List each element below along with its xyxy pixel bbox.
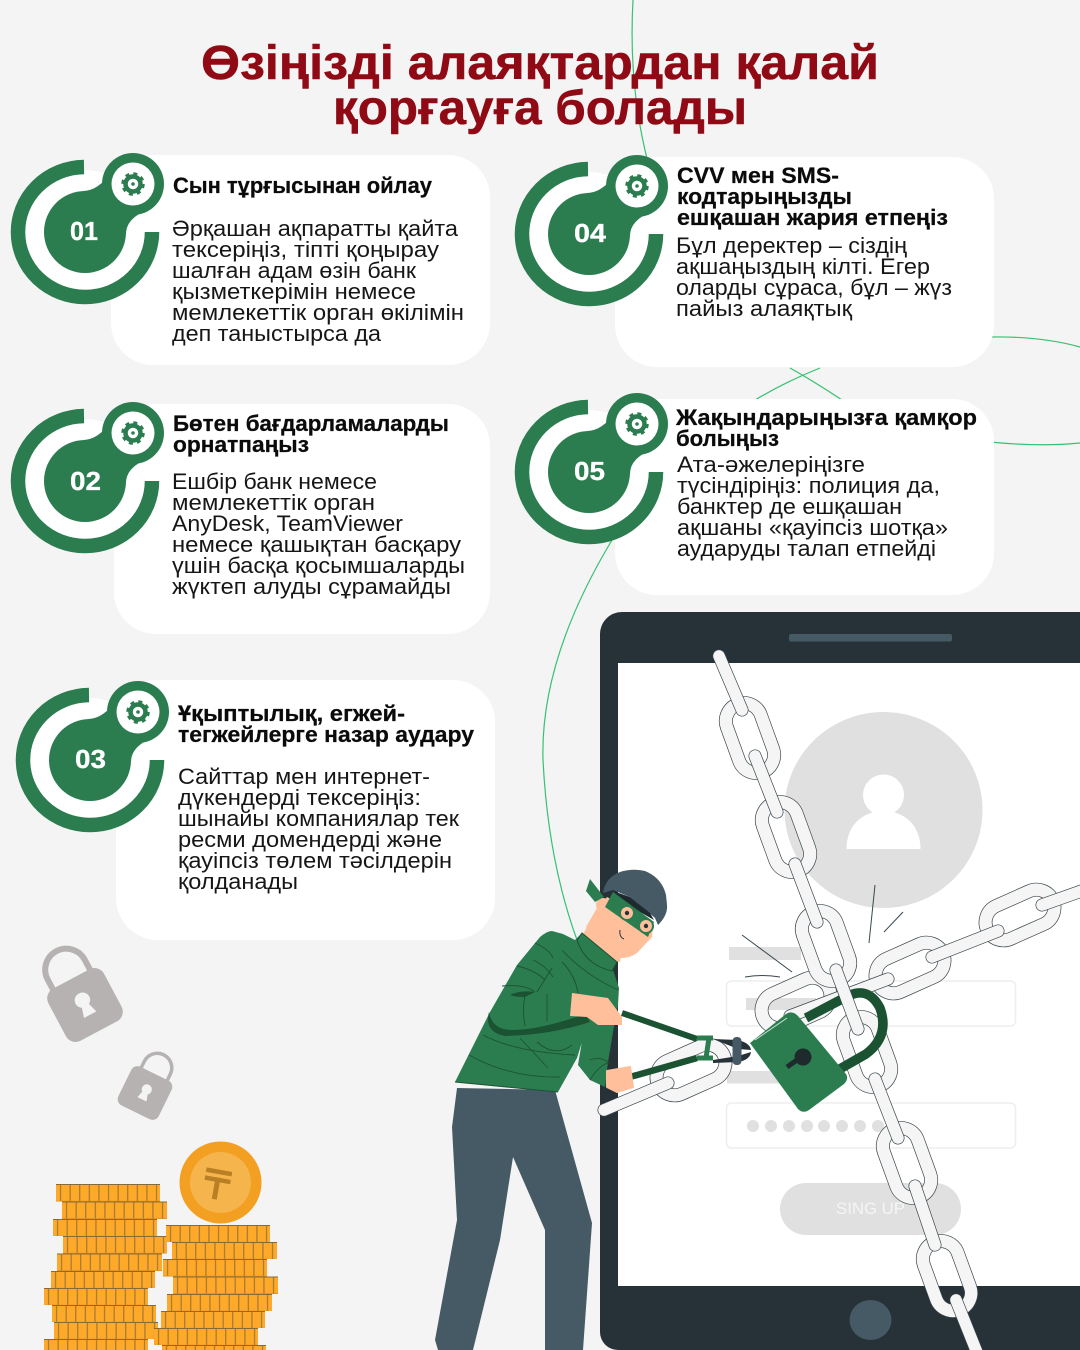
thief hair	[613, 891, 654, 920]
panel: tip 02: AnyDesk, TeamViewer	[172, 511, 404, 536]
thief head	[586, 897, 653, 958]
chain: horizontal	[604, 884, 1080, 1110]
panel: tip 03: ресми домендерді және	[178, 827, 442, 852]
panel: tip 02: үшін басқа қосымшаларды	[172, 553, 465, 578]
panel: tip 04: кодтарыңызды	[677, 184, 852, 209]
panel: tip 01: Әрқашан ақпаратты қайта	[172, 216, 459, 241]
spark lines	[742, 885, 903, 977]
thief sweater	[455, 931, 619, 1092]
icon: small grey padlock	[115, 1045, 184, 1122]
panel: tip 02: Бөтен бағдарламаларды	[173, 411, 449, 436]
green padlock	[750, 1012, 847, 1112]
panel: tip 05: түсіндіріңіз: полиция да,	[677, 473, 940, 498]
panel: tip 03: дүкендерді тексеріңіз:	[178, 785, 421, 810]
panel: tip 01: Сын тұрғысынан ойлау	[173, 173, 433, 198]
panel: tip 02: жүктеп алуды сұрамайды	[172, 574, 451, 599]
panel: tip 02	[18, 402, 490, 634]
panel: tip 02: 02	[70, 466, 101, 496]
panel: tip 05: Жақындарыңызға қамқор	[675, 405, 977, 430]
coin stack: right	[154, 1225, 278, 1350]
padlock shackle	[806, 993, 883, 1070]
sign up button: SING UP	[836, 1200, 905, 1218]
thief hat	[603, 870, 667, 925]
panel: tip 05	[522, 393, 994, 595]
tablet screen	[618, 663, 1080, 1286]
thief ear	[596, 898, 610, 912]
tablet speaker	[789, 634, 952, 642]
thief mask	[586, 879, 654, 939]
panel: tip 01: шалған адам өзін банк	[172, 258, 416, 283]
panel: tip 02: Ешбір банк немесе	[172, 469, 377, 494]
panel: tip 05: аударуды талап етпейді	[677, 536, 936, 561]
thief upper hand	[570, 993, 622, 1025]
panel: tip 03: қауіпсіз төлем тәсілдерін	[178, 848, 452, 873]
panel: tip 05: ақшаны «қауіпсіз шотқа»	[677, 515, 948, 540]
panel: tip 04: оларды сұраса, бұл – жүз	[676, 275, 952, 300]
panel: tip 04: CVV мен SMS-	[677, 163, 839, 188]
icon: tenge coin	[180, 1142, 262, 1224]
panel: tip 01	[18, 153, 490, 365]
coin stack: left	[44, 1184, 167, 1350]
panel: tip 01: тексеріңіз, тіпті қоңырау	[172, 237, 440, 262]
chain: diagonal	[719, 656, 980, 1350]
panel: tip 01: деп таныстырса да	[172, 321, 382, 346]
login form	[726, 947, 1016, 1235]
panel: tip 03: шынайы компаниялар тек	[178, 806, 459, 831]
icon: large grey padlock	[29, 936, 127, 1046]
panel: tip 05: болыңыз	[676, 426, 779, 451]
panel: tip 03: қолданады	[178, 869, 298, 894]
thief sweater folds	[455, 943, 618, 1092]
title: Өзіңізді алаяқтардан қалай	[201, 37, 879, 90]
panel: tip 04: 04	[574, 218, 607, 248]
thief neck	[580, 908, 625, 962]
panel: tip 03: Сайттар мен интернет-	[178, 764, 430, 789]
panel: tip 04: пайыз алаяқтық	[676, 296, 852, 321]
panel: tip 05: Ата-әжелеріңізге	[677, 452, 865, 477]
panel: tip 03	[23, 680, 495, 940]
panel: tip 03: тегжейлерге назар аудару	[178, 722, 475, 747]
sign up button	[780, 1183, 961, 1235]
panel: tip 04: Бұл деректер – сіздің	[676, 233, 908, 258]
panel: tip 01: 01	[70, 216, 98, 246]
title	[201, 37, 879, 135]
panel: tip 01: қызметкерімін немесе	[172, 279, 416, 304]
panel: tip 01: мемлекеттік орган өкілімін	[172, 300, 464, 325]
panel: tip 02: мемлекеттік орган	[172, 490, 375, 515]
thief character	[435, 870, 667, 1350]
panel: tip 03: 03	[75, 744, 106, 774]
panel: tip 02: немесе қашықтан басқару	[172, 532, 462, 557]
panel: tip 03: Ұқыптылық, егжей-	[178, 701, 405, 726]
chain link over shackle	[836, 970, 858, 1029]
thief sleeve shadow	[488, 991, 590, 1036]
thief trousers	[435, 1088, 592, 1350]
panel: tip 04	[522, 155, 994, 367]
panel: tip 05: 05	[574, 456, 605, 486]
thief lower hand	[607, 1067, 633, 1092]
panel: tip 02: орнатпаңыз	[173, 432, 309, 457]
avatar	[784, 712, 982, 908]
bolt cutters	[622, 1013, 751, 1077]
tablet home button	[850, 1300, 892, 1340]
thin green decorative curves	[543, 0, 1080, 940]
panel: tip 04: ақшаңыздың кілті. Егер	[676, 254, 930, 279]
panel: tip 05: банктер де ешқашан	[677, 494, 902, 519]
title: қорғауға болады	[333, 82, 747, 135]
tablet device	[600, 612, 1080, 1350]
panel: tip 04: ешқашан жария етпеңіз	[677, 205, 948, 230]
thief collar	[577, 933, 617, 971]
